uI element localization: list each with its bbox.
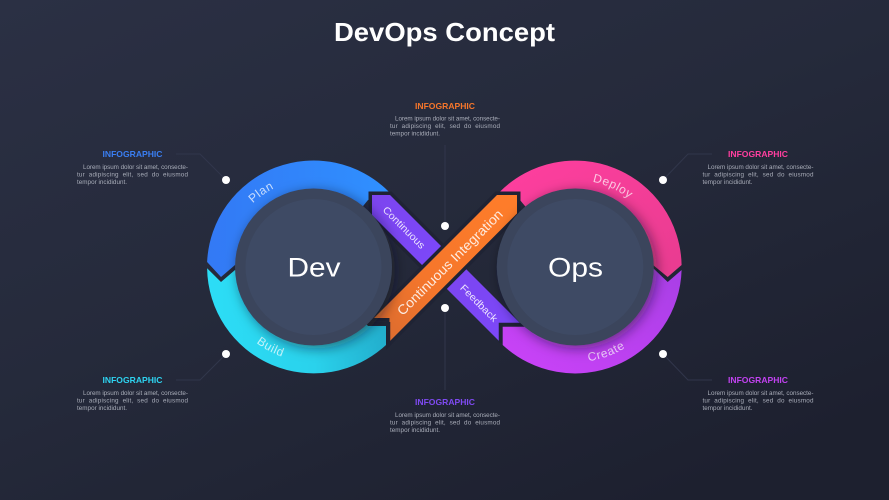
connector: top right — [659, 154, 712, 184]
ring segment: magenta create — [500, 267, 682, 373]
text block: top right: tempor incididunt. — [702, 179, 753, 186]
text block: top center: Lorem ipsum dolor sit amet, consecte- — [395, 115, 500, 122]
text block: bottom right: Lorem ipsum dolor sit amet, consecte- — [708, 390, 814, 397]
disc: Dev — [235, 188, 392, 346]
ribbon: continuous — [372, 195, 445, 268]
text block: bottom right: tempor incididunt. — [702, 405, 753, 412]
text block: bottom center: tempor incididunt. — [390, 427, 440, 434]
connector: bottom right — [659, 350, 712, 380]
text block: bottom right: INFOGRAPHIC — [728, 375, 788, 385]
text block: top center: tur adipiscing elit, sed do eiusmod — [390, 123, 500, 130]
text block: top right: Lorem ipsum dolor sit amet, consecte- — [708, 164, 814, 171]
text block: top left: INFOGRAPHIC — [102, 149, 162, 159]
connector: top left — [176, 154, 230, 184]
ring segment: pink deploy — [500, 161, 682, 277]
text block: bottom center: INFOGRAPHIC — [415, 397, 475, 407]
disc: Ops — [497, 188, 654, 346]
ring segment: cyan build — [207, 267, 388, 373]
text block: bottom center: Lorem ipsum dolor sit amet, consecte- — [395, 412, 500, 419]
ribbon: continuous integration — [374, 195, 517, 342]
title: DevOps Concept — [334, 17, 555, 47]
text block: top center: tempor incididunt. — [390, 130, 440, 137]
text block: top right: tur adipiscing elit, sed do eiusmod — [702, 172, 814, 178]
text block: top left: tempor incididunt. — [77, 179, 127, 186]
text block: top left: Lorem ipsum dolor sit amet, consecte- — [83, 164, 188, 171]
label: Feedback: Feedback — [457, 283, 500, 325]
text block: top right — [702, 149, 814, 186]
text block: top left: tur adipiscing elit, sed do eiusmod — [77, 172, 188, 178]
text block: bottom left: Lorem ipsum dolor sit amet, consecte- — [83, 390, 188, 397]
label: Build: Build — [257, 336, 284, 356]
connector: bottom left — [176, 350, 230, 380]
text block: bottom left: tempor incididunt. — [77, 405, 127, 412]
connector: bottom center — [441, 304, 449, 390]
text block: top center: INFOGRAPHIC — [415, 101, 475, 111]
ring segment: blue plan — [207, 160, 389, 277]
text block: bottom right: tur adipiscing elit, sed do eiusmod — [702, 398, 814, 404]
text block: bottom left: tur adipiscing elit, sed do eiusmod — [77, 398, 188, 404]
text block: bottom center: tur adipiscing elit, sed do eiusmod — [390, 420, 500, 426]
ribbon: feedback — [435, 258, 520, 341]
label: Deploy: Deploy — [594, 174, 633, 198]
label: Plan: Plan — [248, 184, 274, 202]
disc: Ops: Ops — [548, 252, 603, 282]
text block: top left — [77, 149, 188, 186]
disc: Dev: Dev — [288, 252, 341, 282]
text block: bottom center — [390, 397, 500, 434]
label: Continuous: Continuous — [380, 205, 427, 252]
label: Create: Create — [588, 344, 624, 361]
text block: top right: INFOGRAPHIC — [728, 149, 788, 159]
connector: top center — [441, 145, 449, 230]
text block: bottom left: INFOGRAPHIC — [102, 375, 162, 385]
text block: bottom right — [702, 375, 814, 412]
label: Continuous Integration: Continuous Integration — [394, 207, 506, 318]
text block: bottom left — [77, 375, 188, 412]
text block: top center — [390, 101, 500, 137]
